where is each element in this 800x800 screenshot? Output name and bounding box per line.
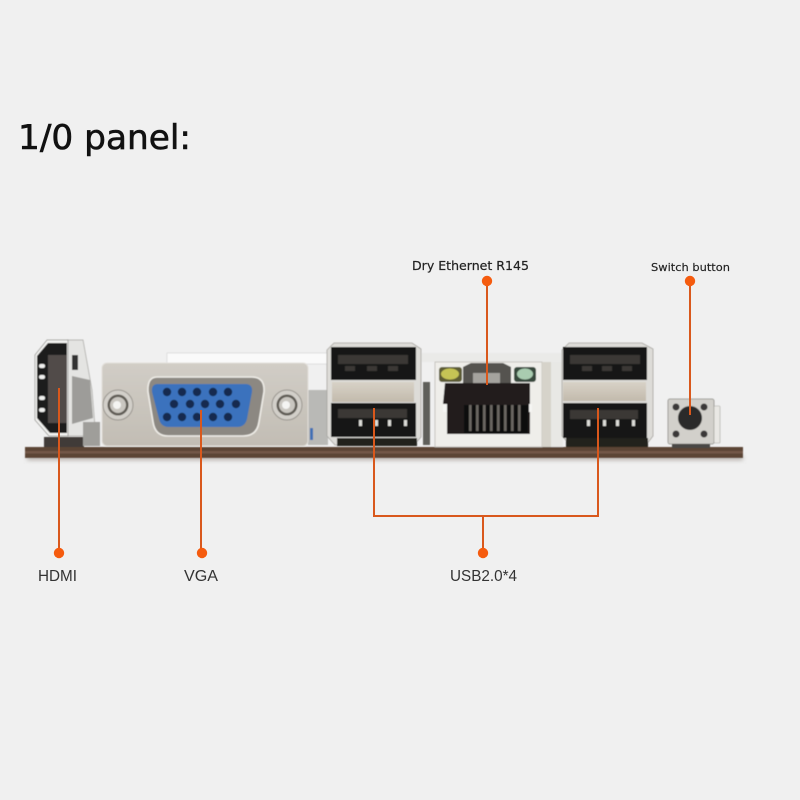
callout: VGA <box>197 410 207 558</box>
title: 1/0 panel: <box>18 118 191 158</box>
HDMI connector <box>35 340 100 447</box>
VGA screws <box>103 390 302 420</box>
VGA plate <box>102 363 308 446</box>
label: HDMI: HDMI <box>38 568 77 585</box>
VGA shell <box>148 377 264 436</box>
callout: Ethernet <box>482 276 492 385</box>
board and connectors <box>25 340 743 460</box>
label: Switch button: Switch button <box>651 261 730 274</box>
rear bracket <box>167 353 565 447</box>
label: Dry Ethernet R145: Dry Ethernet R145 <box>412 259 529 273</box>
label: VGA: VGA <box>184 568 219 585</box>
VGA connector <box>102 363 308 446</box>
switch button <box>668 399 720 448</box>
circuit board <box>25 447 743 460</box>
Ethernet connector <box>435 362 551 447</box>
green LED <box>514 367 536 382</box>
callout: HDMI <box>54 388 64 558</box>
VGA pins <box>163 388 240 421</box>
callout: switch button <box>685 276 695 415</box>
callout: USB bracket <box>374 408 598 558</box>
label: USB2.0*4: USB2.0*4 <box>450 568 517 585</box>
USB connector left <box>327 343 430 446</box>
VGA socket <box>152 384 252 427</box>
yellow LED <box>439 367 462 382</box>
USB connector right <box>562 343 653 447</box>
